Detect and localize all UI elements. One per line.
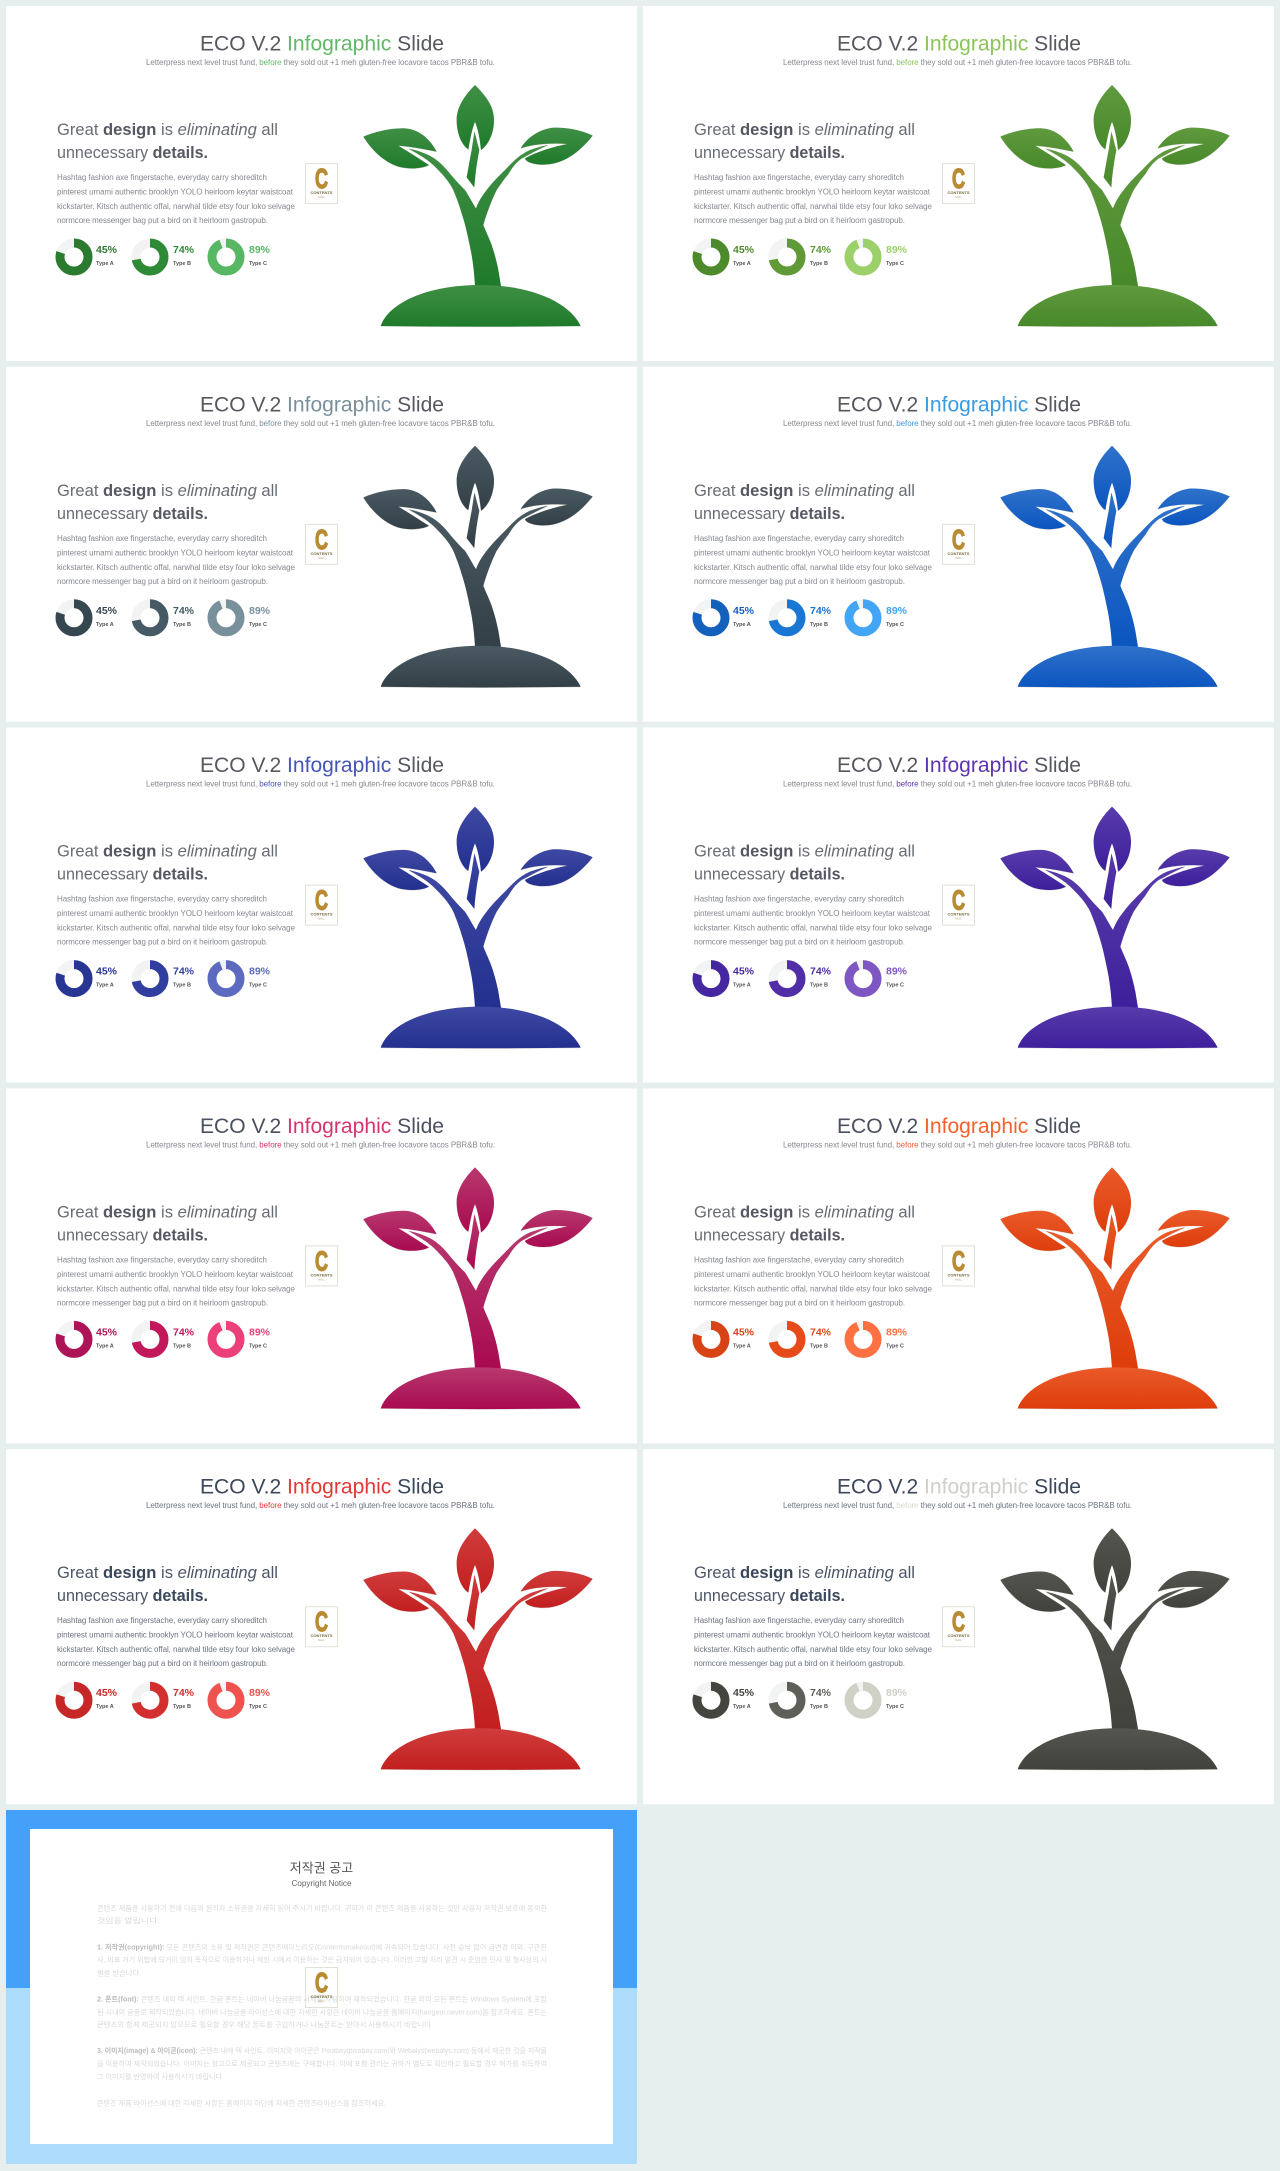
logo badge xyxy=(306,163,338,204)
body text: Hashtag fashion axe fingerstache, everyday carry shoreditch xyxy=(694,534,904,543)
notice section: image and icon: 을 이용하여 제작되었습니다. 이미지는 참고으로 제공되고 콘텐츠에는 구매합니다. 이에 포함 관리는 귀하가 별도로 확인하고 필요할 경우 허가를 취득하여 xyxy=(97,2059,547,2068)
heading: unnecessary details. xyxy=(57,504,208,523)
body text: pinterest umami authentic brooklyn YOLO heirloom keytar waistcoat xyxy=(694,188,931,196)
logo badge: C xyxy=(315,524,328,555)
heading xyxy=(694,120,915,162)
logo badge xyxy=(942,1606,974,1647)
body text: normcore messenger bag put a bird on it heirloom gastropub. xyxy=(694,938,905,947)
donut chart: Type C xyxy=(212,965,271,993)
body text: normcore messenger bag put a bird on it heirloom gastropub. xyxy=(57,216,268,225)
donut chart: Type C: Type C xyxy=(249,622,267,628)
subtitle: Letterpress next level trust fund, before they sold out +1 meh gluten-free locavore tacos PBR&B tofu. xyxy=(783,1501,1132,1510)
body text: kickstarter. Kitsch authentic offal, narwhal tilde etsy four loko selvage xyxy=(694,202,933,211)
subtitle: Letterpress next level trust fund, before they sold out +1 meh gluten-free locavore tacos PBR&B tofu. xyxy=(146,1140,495,1149)
notice section: copyright: 사, 비표 거기 위법에 의거이 엄히 목적으로 이용하거나 제한 시에서 이용하는 것은 금지되어 있습니다. 이러한 고발 처리 발견 시 준엄한 민사 및 형사상의 시 xyxy=(97,1955,547,1964)
title: ECO V.2 Infographic Slide xyxy=(200,1476,444,1499)
panel: copyright notice xyxy=(6,1810,637,2164)
donut chart: Type B: 74% xyxy=(173,1687,195,1699)
body text: normcore messenger bag put a bird on it heirloom gastropub. xyxy=(694,1659,905,1668)
body text: Hashtag fashion axe fingerstache, everyday carry shoreditch xyxy=(57,895,267,904)
body text: kickstarter. Kitsch authentic offal, narwhal tilde etsy four loko selvage xyxy=(57,1284,296,1293)
donut chart: Type B xyxy=(136,965,195,993)
heading xyxy=(57,842,278,884)
body text: kickstarter. Kitsch authentic offal, narwhal tilde etsy four loko selvage xyxy=(694,1645,933,1654)
donut chart: Type A: Type A xyxy=(96,1343,114,1349)
title: ECO V.2 Infographic Slide xyxy=(200,1115,444,1138)
donut chart: Type C: 89% xyxy=(886,1687,908,1699)
donut chart: Type B: Type B xyxy=(810,261,828,267)
donut chart: Type C: Type C xyxy=(886,1343,904,1349)
donut chart: Type C: 89% xyxy=(249,1326,271,1338)
body text xyxy=(57,1255,296,1307)
title: ECO V.2 Infographic Slide xyxy=(200,754,444,777)
heading: Great design is eliminating all xyxy=(57,120,278,139)
donut chart: Type A xyxy=(60,1686,118,1714)
donut chart: Type A xyxy=(697,965,755,993)
notice section: copyright: 1. 저작권(copyright): 모든 콘텐츠의 소유 및 저작권은 콘텐츠메이느리오(Contentsmakeout)에 귀속되어 있습니다. 사전 승낙 없이 급변경 이외, 구관한 xyxy=(97,1942,548,1952)
title: ECO V.2 Infographic Slide xyxy=(837,1115,1081,1138)
body text: pinterest umami authentic brooklyn YOLO heirloom keytar waistcoat xyxy=(57,909,294,918)
body text: pinterest umami authentic brooklyn YOLO heirloom keytar waistcoat xyxy=(57,548,294,557)
donut chart: Type B: 74% xyxy=(810,244,832,256)
heading: Great design is eliminating all xyxy=(694,1563,915,1582)
donut chart: Type C xyxy=(212,1325,271,1353)
body text xyxy=(694,173,933,225)
logo badge xyxy=(306,1606,338,1647)
heading: Great design is eliminating all xyxy=(694,1202,915,1221)
donut chart: Type C xyxy=(212,604,271,632)
title: ECO V.2 Infographic Slide xyxy=(200,32,444,56)
donut chart: Type C: Type C xyxy=(249,1704,267,1710)
body text xyxy=(694,1255,933,1307)
donut chart: Type C: Type C xyxy=(886,1704,904,1710)
subtitle: Letterpress next level trust fund, before they sold out +1 meh gluten-free locavore tacos PBR&B tofu. xyxy=(783,780,1132,789)
logo badge: C xyxy=(315,885,328,916)
body text: pinterest umami authentic brooklyn YOLO heirloom keytar waistcoat xyxy=(57,1631,294,1640)
notice intro xyxy=(97,1904,548,1925)
donut chart: Type A xyxy=(697,604,755,632)
donut chart: Type C: Type C xyxy=(249,261,267,267)
heading: Great design is eliminating all xyxy=(694,842,915,861)
donut chart: Type C xyxy=(849,1325,908,1353)
icon: sprout tree xyxy=(1000,1167,1230,1409)
notice section: image and icon xyxy=(97,2046,548,2081)
donut chart: Type B: 74% xyxy=(810,966,832,978)
body text: kickstarter. Kitsch authentic offal, narwhal tilde etsy four loko selvage xyxy=(57,563,296,572)
body text: normcore messenger bag put a bird on it heirloom gastropub. xyxy=(694,216,905,225)
heading: unnecessary details. xyxy=(694,143,845,162)
donut chart: Type B xyxy=(136,604,195,632)
panel: green variant xyxy=(6,6,637,361)
donut chart: Type B: 74% xyxy=(173,244,195,256)
logo badge xyxy=(306,1967,338,2008)
donut chart: Type C: Type C xyxy=(886,261,904,267)
logo badge: CONTENTS xyxy=(310,912,333,917)
logo badge: MALL xyxy=(318,2000,325,2003)
heading xyxy=(694,481,915,523)
donut chart: Type A: 45% xyxy=(733,966,755,978)
icon: sprout tree xyxy=(1000,85,1230,327)
icon: sprout tree xyxy=(363,1528,593,1770)
donut chart: Type A xyxy=(697,1325,755,1353)
donut chart: Type C xyxy=(212,1686,271,1714)
heading: Great design is eliminating all xyxy=(57,1202,278,1221)
logo badge: C xyxy=(315,1967,328,1998)
body text: kickstarter. Kitsch authentic offal, narwhal tilde etsy four loko selvage xyxy=(57,924,296,933)
heading: unnecessary details. xyxy=(694,865,845,884)
donut chart: Type B: 74% xyxy=(173,605,195,617)
heading: Great design is eliminating all xyxy=(57,1563,278,1582)
donut chart: Type B xyxy=(773,243,832,271)
heading: unnecessary details. xyxy=(57,143,208,162)
body text: Hashtag fashion axe fingerstache, everyday carry shoreditch xyxy=(57,1616,267,1625)
logo badge: CONTENTS xyxy=(948,190,970,195)
donut chart: Type A: 45% xyxy=(733,1687,755,1699)
heading: unnecessary details. xyxy=(57,865,208,884)
notice section: copyright: 벌을 받습니다. xyxy=(97,1968,141,1978)
body text: Hashtag fashion axe fingerstache, everyday carry shoreditch xyxy=(694,895,904,904)
logo badge: MALL xyxy=(955,918,962,921)
donut chart: Type C xyxy=(849,243,908,271)
heading: Great design is eliminating all xyxy=(694,120,915,139)
subtitle: Letterpress next level trust fund, before they sold out +1 meh gluten-free locavore tacos PBR&B tofu. xyxy=(146,1501,495,1510)
heading: unnecessary details. xyxy=(57,1586,208,1605)
logo badge xyxy=(942,524,974,564)
donut chart: Type B: Type B xyxy=(173,1343,191,1349)
donut chart: Type B: Type B xyxy=(173,622,191,628)
donut chart: Type A xyxy=(60,604,118,632)
heading: unnecessary details. xyxy=(694,504,845,523)
body text: normcore messenger bag put a bird on it heirloom gastropub. xyxy=(694,1298,905,1307)
donut chart: Type C: 89% xyxy=(886,244,908,256)
body text: kickstarter. Kitsch authentic offal, narwhal tilde etsy four loko selvage xyxy=(694,1284,933,1293)
donut chart: Type A xyxy=(60,243,118,271)
donut chart: Type C: 89% xyxy=(886,605,908,617)
donut chart: Type B: Type B xyxy=(810,983,828,989)
icon: sprout tree xyxy=(363,85,593,327)
logo badge: C xyxy=(952,1606,965,1637)
logo badge: C xyxy=(315,1606,328,1637)
donut chart: Type A: 45% xyxy=(96,244,118,256)
logo badge: MALL xyxy=(318,918,325,921)
panel: pink variant xyxy=(6,1088,637,1443)
body text: Hashtag fashion axe fingerstache, everyday carry shoreditch xyxy=(57,1255,267,1264)
donut chart: Type C: 89% xyxy=(886,966,908,978)
donut chart: Type A: 45% xyxy=(96,605,118,617)
logo badge: CONTENTS xyxy=(948,1633,970,1638)
donut chart: Type B: Type B xyxy=(810,622,828,628)
logo badge: C xyxy=(952,163,965,194)
body text: Hashtag fashion axe fingerstache, everyday carry shoreditch xyxy=(57,534,267,543)
title: ECO V.2 Infographic Slide xyxy=(837,1476,1081,1499)
body text: normcore messenger bag put a bird on it heirloom gastropub. xyxy=(57,577,268,586)
logo badge: CONTENTS xyxy=(948,551,970,556)
donut chart: Type A: Type A xyxy=(733,622,751,628)
body text xyxy=(57,1616,296,1668)
logo badge xyxy=(942,1245,974,1286)
body text: normcore messenger bag put a bird on it heirloom gastropub. xyxy=(694,577,905,586)
logo badge: CONTENTS xyxy=(310,1272,333,1277)
notice subtitle: Copyright Notice xyxy=(292,1879,352,1888)
logo badge: MALL xyxy=(955,1639,962,1642)
donut chart: Type C: Type C xyxy=(249,983,267,989)
notice section: image and icon: 그 이미지를 반영하여 사용하시기 바랍니다. xyxy=(97,2072,224,2081)
body text: pinterest umami authentic brooklyn YOLO heirloom keytar waistcoat xyxy=(694,909,931,918)
heading xyxy=(694,842,915,884)
subtitle: Letterpress next level trust fund, before they sold out +1 meh gluten-free locavore tacos PBR&B tofu. xyxy=(146,58,495,67)
notice title: 저작권 공고 xyxy=(290,1860,353,1876)
body text xyxy=(694,1616,933,1668)
notice intro: 콘텐츠 제품을 사용하기 전에 다음의 원작자 소유권을 자세히 읽어 주시기 바랍니다. 귀하가 이 콘텐츠 제품을 사용하는 것만 사용자 저작권 보호에 동의한 xyxy=(97,1904,548,1912)
panel: purple variant xyxy=(643,728,1274,1083)
heading: unnecessary details. xyxy=(694,1586,845,1605)
donut chart: Type C xyxy=(212,243,271,271)
donut chart: Type A xyxy=(697,243,755,271)
donut chart: Type B xyxy=(136,243,195,271)
notice section: copyright xyxy=(97,1942,548,1978)
donut chart: Type A xyxy=(60,965,118,993)
body text: pinterest umami authentic brooklyn YOLO heirloom keytar waistcoat xyxy=(694,1270,931,1279)
title: ECO V.2 Infographic Slide xyxy=(837,754,1081,777)
donut chart: Type A: 45% xyxy=(96,1687,118,1699)
body text: normcore messenger bag put a bird on it heirloom gastropub. xyxy=(57,938,268,947)
donut chart: Type C: Type C xyxy=(249,1343,267,1349)
donut chart: Type C: 89% xyxy=(249,605,271,617)
subtitle: Letterpress next level trust fund, before they sold out +1 meh gluten-free locavore tacos PBR&B tofu. xyxy=(783,58,1132,67)
donut chart: Type B xyxy=(136,1325,195,1353)
heading: Great design is eliminating all xyxy=(57,842,278,861)
panel: charcoal variant xyxy=(643,1449,1274,1804)
logo badge: C xyxy=(952,1245,965,1276)
heading xyxy=(57,120,278,162)
icon: sprout tree xyxy=(1000,446,1230,687)
heading xyxy=(57,1202,278,1244)
body text xyxy=(57,534,296,586)
icon: sprout tree xyxy=(1000,807,1230,1048)
donut chart: Type C xyxy=(849,1686,908,1714)
body text: Hashtag fashion axe fingerstache, everyday carry shoreditch xyxy=(694,173,904,182)
title: ECO V.2 Infographic Slide xyxy=(837,393,1081,416)
body text: Hashtag fashion axe fingerstache, everyday carry shoreditch xyxy=(694,1616,904,1625)
heading xyxy=(57,481,278,523)
donut chart: Type A: Type A xyxy=(96,983,114,989)
logo badge: MALL xyxy=(955,196,962,199)
notice intro: 것임을 알립니다. xyxy=(97,1916,160,1925)
donut chart: Type A: Type A xyxy=(96,261,114,267)
icon: sprout tree xyxy=(363,1167,593,1409)
logo badge xyxy=(306,1245,338,1286)
donut chart: Type B: Type B xyxy=(173,1704,191,1710)
heading: Great design is eliminating all xyxy=(57,481,278,500)
donut chart: Type B: Type B xyxy=(810,1343,828,1349)
body text: normcore messenger bag put a bird on it heirloom gastropub. xyxy=(57,1298,268,1307)
donut chart: Type B: 74% xyxy=(810,605,832,617)
logo badge xyxy=(942,163,974,204)
donut chart: Type A: Type A xyxy=(733,983,751,989)
logo badge: MALL xyxy=(318,557,325,560)
donut chart: Type A: Type A xyxy=(96,622,114,628)
body text: pinterest umami authentic brooklyn YOLO heirloom keytar waistcoat xyxy=(694,1631,931,1640)
donut chart: Type A: Type A xyxy=(733,1704,751,1710)
notice section: font: 콘텐츠의 함께 제공되지 않으므로 필요할 경우 해당 폰트를 구입하거나 나눔폰트는 받아서 사용하시기 바랍니다. xyxy=(97,2020,433,2029)
donut chart: Type B: Type B xyxy=(810,1704,828,1710)
heading: unnecessary details. xyxy=(694,1225,845,1244)
donut chart: Type A: 45% xyxy=(733,1326,755,1338)
panel: orange variant xyxy=(643,1088,1274,1443)
donut chart: Type A: 45% xyxy=(733,244,755,256)
logo badge: MALL xyxy=(955,1278,962,1281)
donut chart: Type A: Type A xyxy=(733,1343,751,1349)
body text: kickstarter. Kitsch authentic offal, narwhal tilde etsy four loko selvage xyxy=(694,924,933,933)
notice footer: 콘텐츠 제품 라이선스에 대한 자세한 사항은 홈페이지 하단에 자세한 콘텐츠라이선스를 참조하세요. xyxy=(97,2098,386,2108)
donut chart: Type B xyxy=(136,1686,195,1714)
donut chart: Type A: Type A xyxy=(733,261,751,267)
donut chart: Type C: 89% xyxy=(249,1687,271,1699)
title: ECO V.2 Infographic Slide xyxy=(837,32,1081,56)
notice section: font xyxy=(97,1994,548,2029)
donut chart: Type A xyxy=(697,1686,755,1714)
donut chart: Type C: Type C xyxy=(886,983,904,989)
body text xyxy=(57,173,296,225)
body text: Hashtag fashion axe fingerstache, everyday carry shoreditch xyxy=(57,173,267,182)
heading xyxy=(694,1202,915,1244)
body text: pinterest umami authentic brooklyn YOLO heirloom keytar waistcoat xyxy=(57,1270,294,1279)
body text: kickstarter. Kitsch authentic offal, narwhal tilde etsy four loko selvage xyxy=(694,563,933,572)
subtitle: Letterpress next level trust fund, before they sold out +1 meh gluten-free locavore tacos PBR&B tofu. xyxy=(146,419,495,428)
logo badge xyxy=(306,885,338,925)
body text xyxy=(694,895,933,947)
donut chart: Type B xyxy=(773,1686,832,1714)
donut chart: Type B: 74% xyxy=(810,1687,832,1699)
notice section: image and icon: 3. 이미지(image) & 아이콘(icon): 콘텐츠 내에 텍 사인트, 이미지와 아이콘은 Pixabay(pixabay.com)와 Webalys(webalys.com) 등에서 제공한 것을 저작물 xyxy=(97,2046,548,2055)
donut chart: Type A: Type A xyxy=(96,1704,114,1710)
logo badge: MALL xyxy=(318,1278,325,1281)
logo badge: MALL xyxy=(955,557,962,560)
donut chart: Type C: 89% xyxy=(249,966,271,978)
icon: sprout tree xyxy=(363,446,593,687)
logo badge: CONTENTS xyxy=(310,190,333,195)
subtitle: Letterpress next level trust fund, before they sold out +1 meh gluten-free locavore tacos PBR&B tofu. xyxy=(783,419,1132,428)
logo badge: C xyxy=(315,1245,328,1276)
body text: normcore messenger bag put a bird on it heirloom gastropub. xyxy=(57,1659,268,1668)
logo badge: C xyxy=(952,885,965,916)
heading xyxy=(694,1563,915,1605)
body text: Hashtag fashion axe fingerstache, everyday carry shoreditch xyxy=(694,1255,904,1264)
donut chart: Type A: 45% xyxy=(96,966,118,978)
donut chart: Type C: 89% xyxy=(886,1326,908,1338)
logo badge xyxy=(942,885,974,925)
panel: red variant xyxy=(6,1449,637,1804)
donut chart: Type B: Type B xyxy=(173,261,191,267)
donut chart: Type A: 45% xyxy=(96,1326,118,1338)
body text xyxy=(57,895,296,947)
heading xyxy=(57,1563,278,1605)
subtitle: Letterpress next level trust fund, before they sold out +1 meh gluten-free locavore tacos PBR&B tofu. xyxy=(146,780,495,789)
body text: kickstarter. Kitsch authentic offal, narwhal tilde etsy four loko selvage xyxy=(57,1645,296,1654)
body text: pinterest umami authentic brooklyn YOLO heirloom keytar waistcoat xyxy=(57,188,294,196)
heading: unnecessary details. xyxy=(57,1225,208,1244)
panel: slate variant xyxy=(6,367,637,722)
donut chart: Type B xyxy=(773,1325,832,1353)
logo badge: MALL xyxy=(318,196,325,199)
logo badge: CONTENTS xyxy=(310,1994,333,1999)
donut chart: Type C: Type C xyxy=(886,622,904,628)
donut chart: Type B xyxy=(773,604,832,632)
donut chart: Type A: 45% xyxy=(733,605,755,617)
panel: blue variant xyxy=(643,367,1274,722)
icon: sprout tree xyxy=(363,807,593,1048)
donut chart: Type B: Type B xyxy=(173,983,191,989)
notice section: font: 2. 폰트(font): 콘텐츠 내의 텍 사인트, 한글 폰트는 네이버 나눔글꼴의 서체를 사용하여 제작되었습니다. 한글 외의 모든 폰트는 Windows System에 포함 xyxy=(97,1994,548,2004)
donut chart: Type B: 74% xyxy=(173,1326,195,1338)
logo badge: C xyxy=(315,163,328,194)
logo badge: C xyxy=(952,524,965,555)
heading: Great design is eliminating all xyxy=(694,481,915,500)
body text: pinterest umami authentic brooklyn YOLO heirloom keytar waistcoat xyxy=(694,548,931,557)
donut chart: Type A xyxy=(60,1325,118,1353)
logo badge: CONTENTS xyxy=(948,1272,970,1277)
donut chart: Type B: 74% xyxy=(173,966,195,978)
panel: indigo variant xyxy=(6,728,637,1083)
notice section: font: 된 시내의 글꼴로 제작되었습니다. 네이버 나눔글꼴 라이선스에 대한 자세한 사항은 네이버 나눔글꼴 홈페이지(hangeul.naver.com)를 참조하세요. 폰트는 xyxy=(97,2008,548,2016)
donut chart: Type B: 74% xyxy=(810,1326,832,1338)
donut chart: Type C: 89% xyxy=(249,244,271,256)
donut chart: Type C xyxy=(849,604,908,632)
panel: olive green variant xyxy=(643,6,1274,361)
logo badge: CONTENTS xyxy=(948,912,970,917)
logo badge: MALL xyxy=(318,1639,325,1642)
body text xyxy=(694,534,933,586)
notice card xyxy=(30,1829,613,2144)
logo badge xyxy=(306,524,338,564)
icon: sprout tree xyxy=(1000,1528,1230,1770)
donut chart: Type C xyxy=(849,965,908,993)
donut chart: Type B xyxy=(773,965,832,993)
body text: kickstarter. Kitsch authentic offal, narwhal tilde etsy four loko selvage xyxy=(57,202,296,211)
title: ECO V.2 Infographic Slide xyxy=(200,393,444,416)
subtitle: Letterpress next level trust fund, before they sold out +1 meh gluten-free locavore tacos PBR&B tofu. xyxy=(783,1140,1132,1149)
logo badge: CONTENTS xyxy=(310,551,333,556)
logo badge: CONTENTS xyxy=(310,1633,333,1638)
